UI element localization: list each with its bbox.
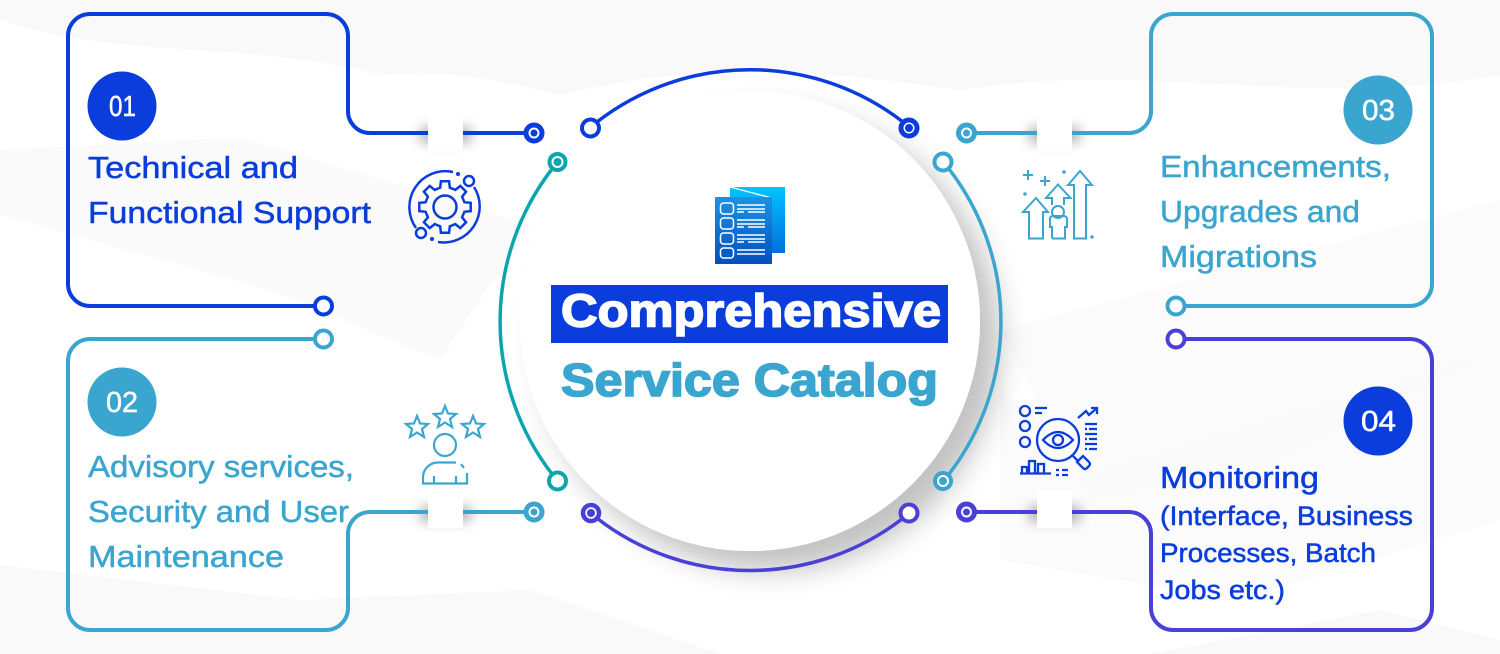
panel 01 outline bbox=[68, 14, 534, 306]
panel 02 text: Security and User bbox=[88, 494, 349, 529]
gap in connector 04 bbox=[1037, 490, 1072, 528]
gap in connector 02 bbox=[428, 490, 463, 528]
icon: person with stars bbox=[406, 406, 484, 484]
title line 1: Comprehensive bbox=[561, 284, 941, 336]
panel 02: advisory services bbox=[68, 330, 542, 630]
panel 01 connector node bbox=[526, 125, 542, 141]
ring arc: right blue bbox=[934, 154, 1001, 489]
panel 04 end node bbox=[1168, 330, 1184, 348]
panel 04: monitoring bbox=[958, 330, 1432, 630]
panel 03 outline bbox=[966, 14, 1432, 306]
panel 03 text: Migrations bbox=[1160, 239, 1317, 274]
panel 02 text bbox=[88, 449, 354, 574]
panel 03 connector node bbox=[958, 125, 974, 141]
panel 03: enhancements bbox=[958, 14, 1432, 314]
gap in connector 03 bbox=[1037, 113, 1072, 151]
number badge 03 bbox=[1344, 76, 1412, 144]
ring arc: top blue bbox=[582, 70, 917, 136]
panel 04 outline bbox=[966, 339, 1432, 630]
title line 2: Service Catalog bbox=[561, 354, 938, 406]
panel 02 connector node bbox=[526, 504, 542, 520]
panel 03 text: Upgrades and bbox=[1160, 194, 1360, 229]
panel 01: technical and functional support bbox=[68, 14, 542, 314]
number badge 04 bbox=[1344, 386, 1412, 456]
panel 02 end node bbox=[315, 330, 332, 348]
panel 01 text: Functional Support bbox=[88, 195, 371, 230]
panel 01 text bbox=[88, 150, 371, 230]
icon: catalog document bbox=[715, 187, 785, 264]
panel 02 outline bbox=[68, 339, 534, 630]
icon: gear bbox=[409, 171, 480, 242]
number badge 02 bbox=[88, 368, 156, 436]
panel 03 text bbox=[1160, 149, 1391, 274]
ring arc: left teal bbox=[500, 154, 566, 490]
number badge 04: 04 bbox=[1361, 406, 1396, 438]
gap in connector 01 bbox=[428, 113, 463, 151]
panel 04 text: Processes, Batch bbox=[1160, 538, 1376, 568]
panel 04 text: Monitoring bbox=[1160, 460, 1319, 495]
central white circle bbox=[520, 91, 980, 551]
panel 04 connector node bbox=[958, 504, 974, 520]
panel 04 text: Jobs etc.) bbox=[1160, 575, 1285, 605]
panel 02 text: Maintenance bbox=[88, 539, 284, 574]
panel 01 end node bbox=[315, 298, 332, 314]
panel 01 text: Technical and bbox=[88, 150, 298, 185]
panel 03 end node bbox=[1168, 298, 1184, 314]
title background band bbox=[551, 285, 948, 343]
center content bbox=[551, 187, 948, 406]
panel 02 text: Advisory services, bbox=[88, 449, 354, 484]
icon: magnifier with eye bbox=[1020, 406, 1097, 475]
number badge 03: 03 bbox=[1362, 95, 1395, 127]
panel 03 text: Enhancements, bbox=[1160, 149, 1391, 184]
ring arc: bottom purple bbox=[583, 504, 918, 571]
connector gap shadows bbox=[420, 127, 1080, 522]
panel 04 text bbox=[1160, 460, 1413, 605]
panel 04 text: (Interface, Business bbox=[1160, 501, 1413, 531]
number badge 01: 01 bbox=[109, 91, 136, 123]
number badge 02: 02 bbox=[106, 387, 138, 419]
icon: growth arrows with person bbox=[1023, 170, 1093, 238]
number badge 01 bbox=[88, 72, 156, 140]
